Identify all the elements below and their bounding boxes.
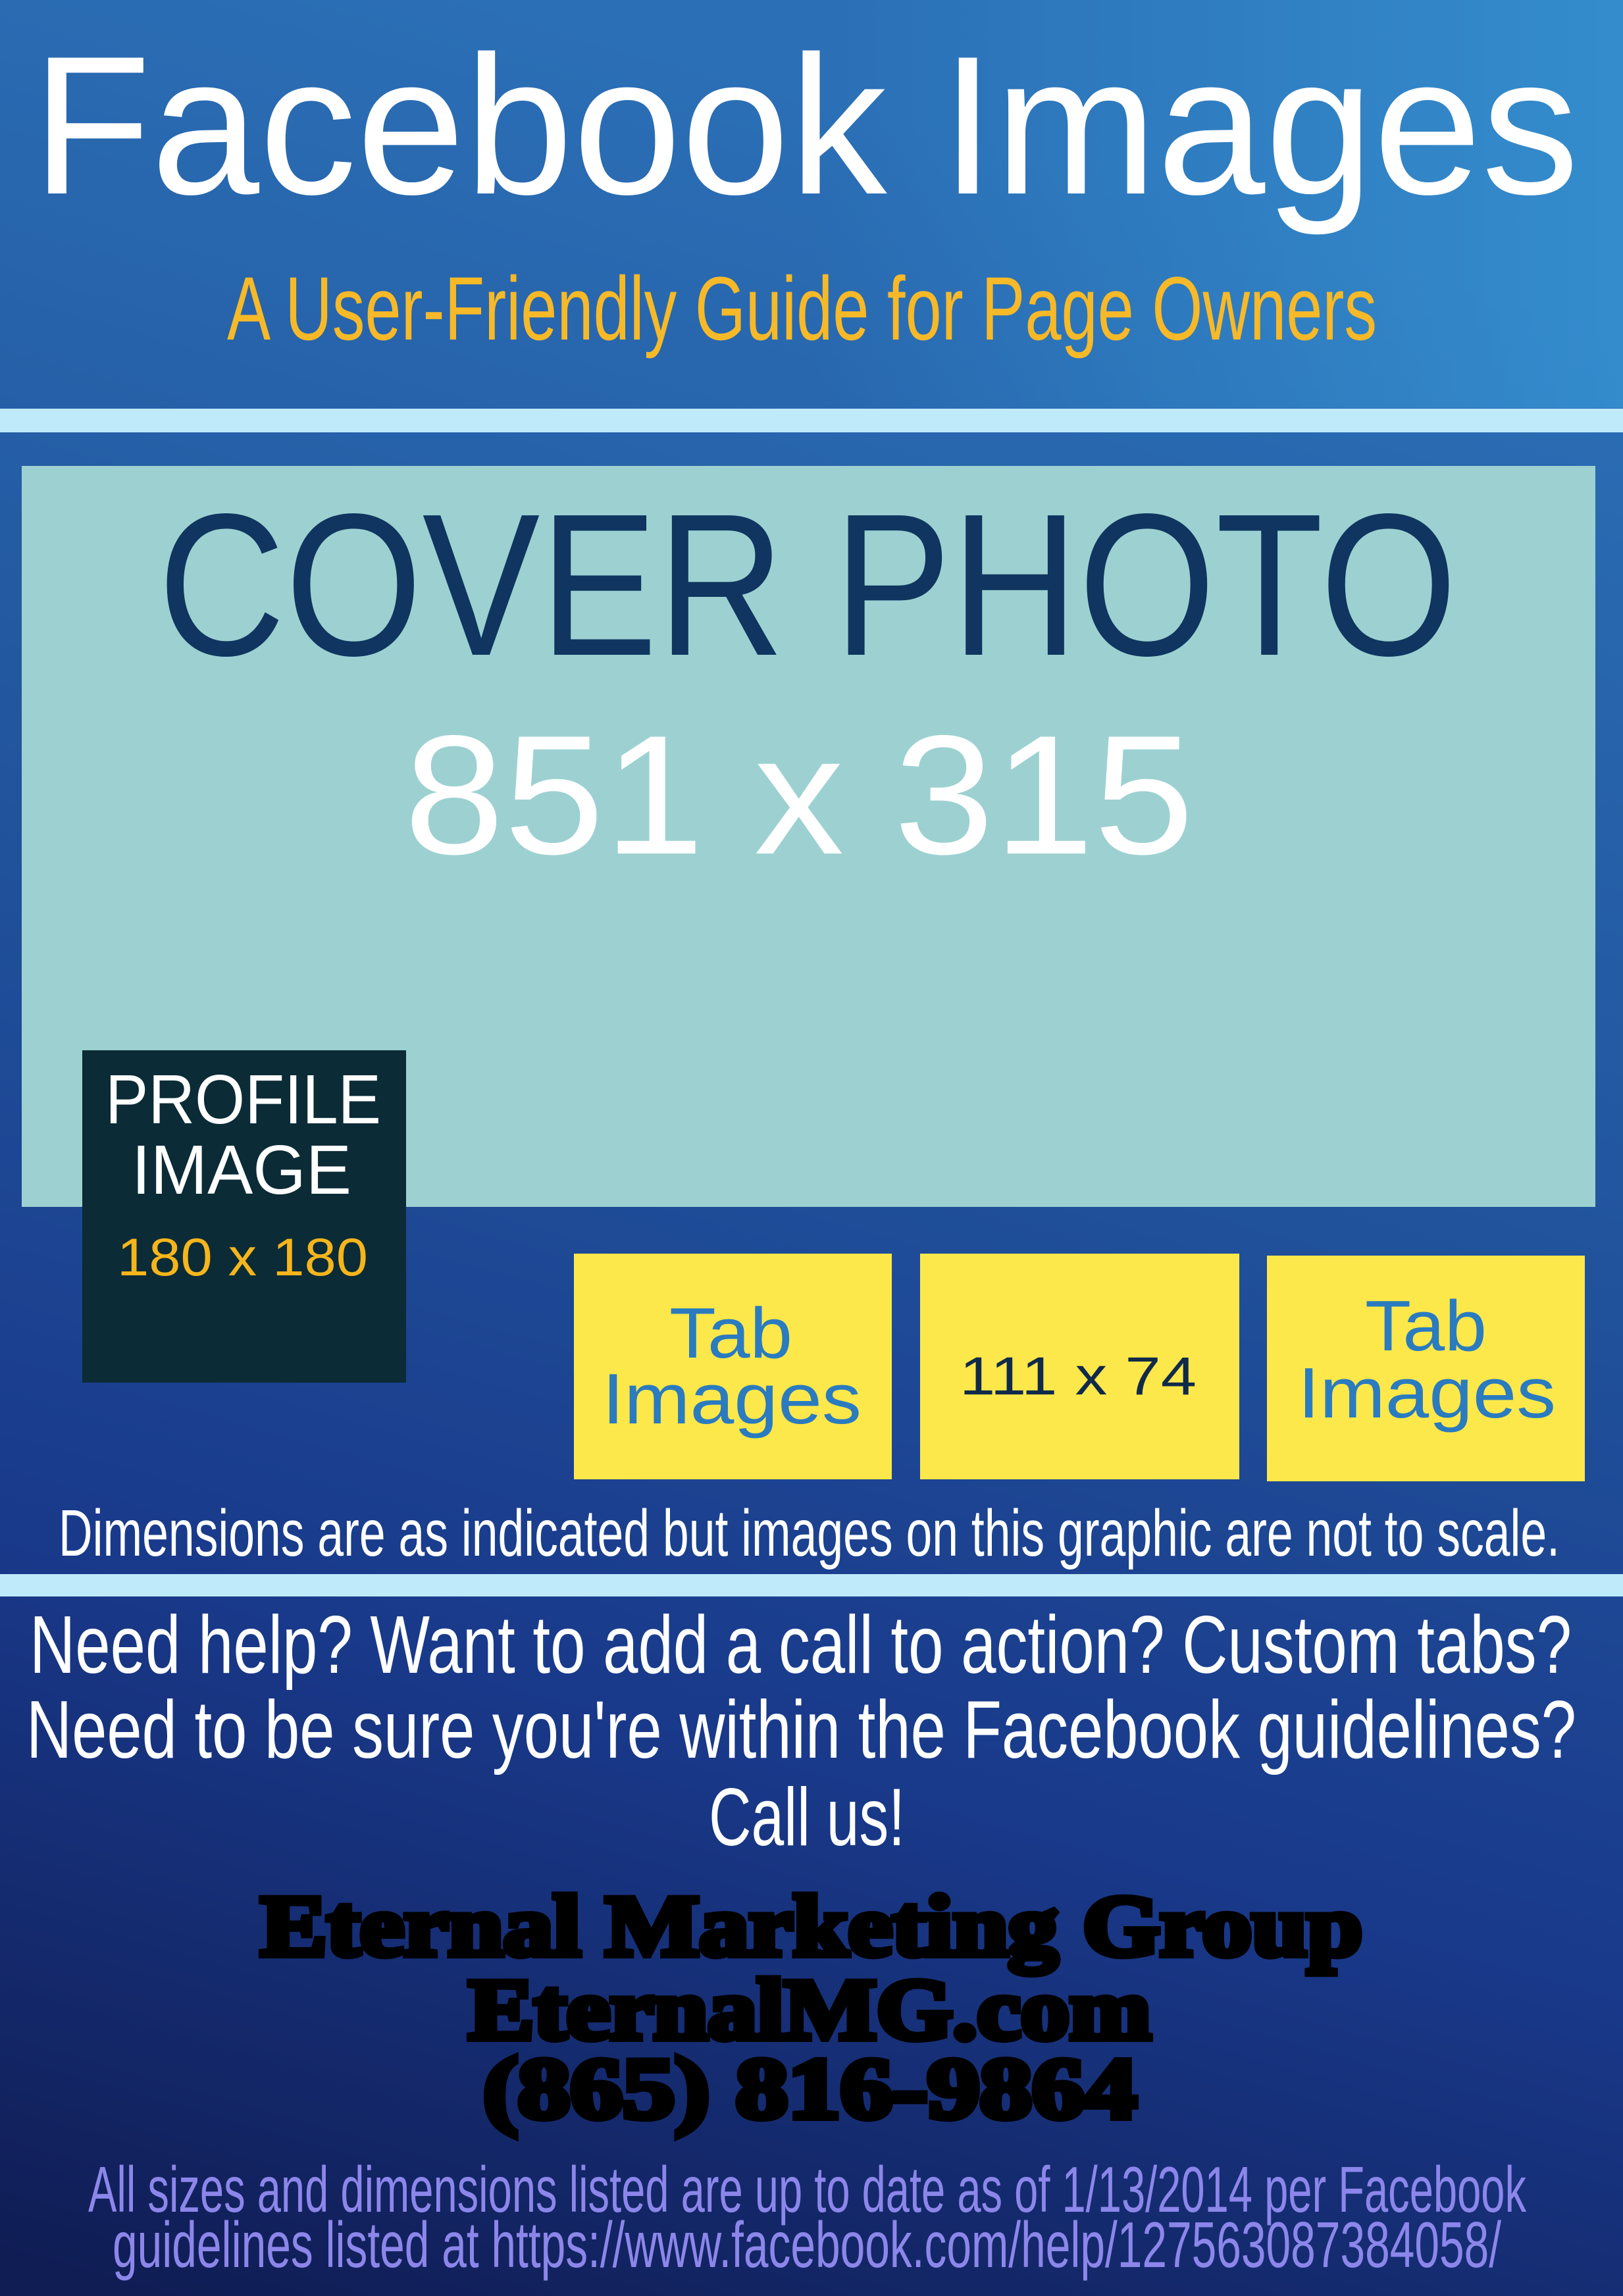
call to action text (26, 1600, 1576, 1863)
panel: profile image: PROFILE (105, 1061, 381, 1138)
title: Facebook Images (32, 14, 1579, 237)
panel: tab image 1: Images (602, 1359, 862, 1439)
footer note (88, 2153, 1527, 2281)
panel: tab dimensions: 111 x 74 (960, 1346, 1197, 1406)
company contact: (865) 816-9864 (483, 2040, 1137, 2137)
company contact: Eternal Marketing Group (261, 1877, 1362, 1974)
company contact (261, 1877, 1362, 2137)
panel: cover photo (22, 466, 1595, 1207)
panel: tab image 2: Images (1298, 1353, 1556, 1433)
panel: tab dimensions (920, 1254, 1239, 1479)
panel: profile image (82, 1050, 406, 1383)
cover photo heading: COVER PHOTO (158, 472, 1457, 698)
panel: tab image 2 (1267, 1256, 1585, 1481)
cover photo dimensions: 851 x 315 (404, 700, 1194, 890)
panel: tab image 1 (574, 1254, 892, 1479)
call to action text: Call us! (709, 1772, 905, 1863)
company contact: EternalMG.com (469, 1961, 1151, 2058)
panel: profile image: 180 x 180 (117, 1228, 368, 1287)
panel: profile image: IMAGE (132, 1131, 351, 1209)
panel: tab image 1: Tab (669, 1293, 792, 1373)
panel: tab image 2: Tab (1365, 1286, 1487, 1366)
